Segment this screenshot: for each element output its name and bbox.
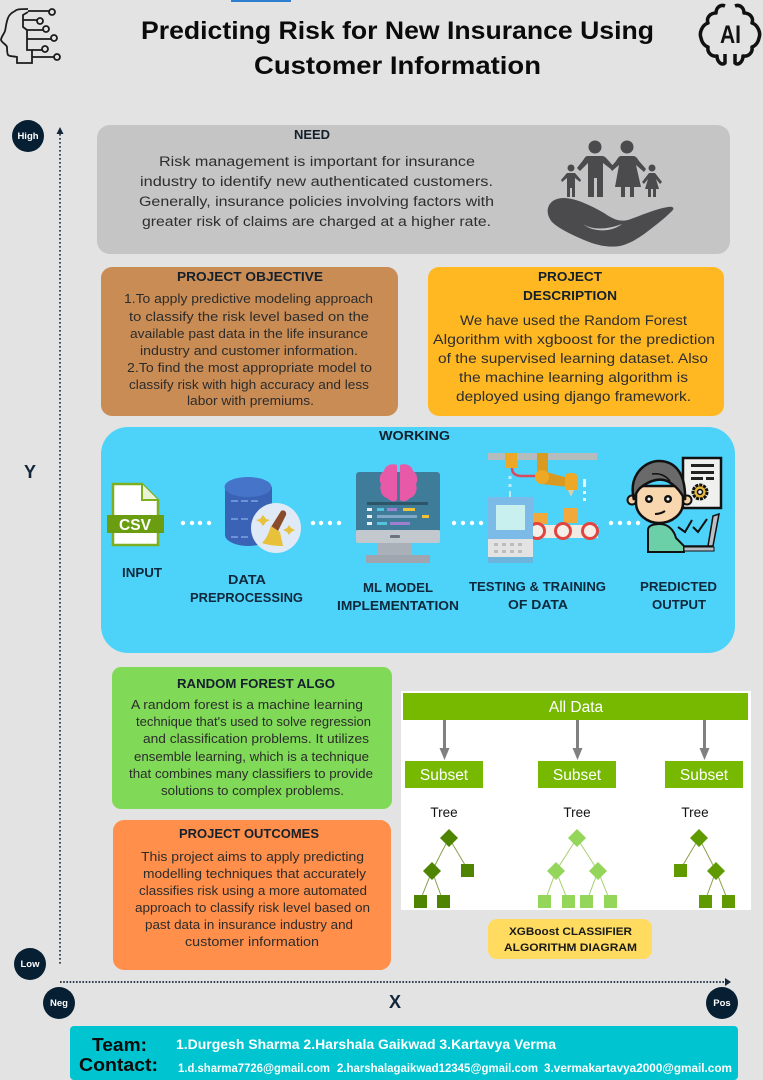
arrows — [440, 720, 710, 760]
panel: project outcomes — [113, 820, 391, 970]
tree labels — [430, 805, 709, 820]
objective text: available past data in the life insurance — [130, 327, 368, 341]
axis label: Pos — [706, 987, 738, 1019]
objective text: classify risk with high accuracy and less — [129, 378, 369, 392]
random forest text: ensemble learning, which is a technique — [134, 750, 369, 764]
title — [141, 17, 654, 80]
step label: data preprocessing: PREPROCESSING — [190, 590, 303, 605]
heading: project description: PROJECT — [538, 269, 602, 284]
step label: ml model implementation: ML MODEL — [363, 580, 433, 595]
axis label: Low — [14, 948, 46, 980]
random forest text: A random forest is a machine learning — [131, 698, 363, 712]
tree 1 — [414, 829, 474, 908]
xgboost diagram: All Data — [549, 699, 604, 716]
icon: csv file: CSV — [119, 517, 151, 534]
connector dots — [609, 521, 640, 525]
outcomes text: classifies risk using a more automated — [139, 884, 367, 898]
random forest text — [129, 698, 373, 798]
need text — [139, 154, 494, 229]
connector dots — [181, 521, 211, 525]
axis label: Neg: Neg — [50, 998, 68, 1009]
contact emails: 1.d.sharma7726@gmail.com — [178, 1063, 330, 1075]
heading: project description: DESCRIPTION — [523, 288, 617, 303]
icon: monitor with brain — [356, 464, 440, 563]
panel: need — [97, 125, 730, 254]
outcomes text: approach to classify risk level based on — [135, 901, 370, 915]
outcomes text: This project aims to apply predicting — [141, 850, 364, 864]
description text: deployed using django framework. — [456, 389, 691, 404]
need text: Generally, insurance policies involving factors with — [139, 194, 494, 209]
objective text: 2.To find the most appropriate model to — [127, 361, 372, 375]
contact emails: 2.harshalagaikwad12345@gmail.com — [337, 1063, 538, 1075]
objective text: industry and customer information. — [140, 344, 358, 358]
contact emails — [178, 1063, 732, 1075]
panel: project objective — [101, 267, 398, 416]
step label: testing and training — [469, 579, 606, 612]
step label: predicted output — [640, 579, 717, 612]
subset boxes — [405, 761, 743, 788]
step label: ml model implementation: IMPLEMENTATION — [337, 598, 459, 613]
heading: project objective: PROJECT OBJECTIVE — [177, 269, 323, 284]
axis label: Low: Low — [20, 959, 40, 970]
step label: testing and training: OF DATA — [508, 597, 569, 612]
objective text: to classify the risk level based on the — [129, 310, 369, 324]
step label: ml model implementation — [337, 580, 459, 613]
step label: testing and training: TESTING & TRAINING — [469, 579, 606, 594]
contact emails: 3.vermakartavya2000@gmail.com — [544, 1063, 732, 1075]
random forest text: that combines many classifiers to provide — [129, 767, 373, 781]
icon: csv file — [107, 484, 164, 545]
caption: xgboost: ALGORITHM DIAGRAM — [504, 942, 637, 954]
random forest text: and classification problems. It utilizes — [143, 732, 369, 746]
random forest text: technique that's used to solve regression — [136, 715, 371, 729]
need text: Risk management is important for insurance — [159, 154, 475, 169]
tree 2 — [538, 829, 617, 908]
axis label: High: High — [17, 131, 39, 142]
team bar — [70, 1026, 738, 1080]
axis label: Pos: Pos — [713, 998, 731, 1009]
icon: AI brain: AI — [720, 21, 741, 49]
heading: project description — [523, 269, 617, 303]
axis label: Neg — [43, 987, 75, 1019]
outcomes text: customer information — [185, 935, 319, 949]
subset boxes: Subset — [553, 767, 602, 784]
caption: xgboost: XGBoost CLASSIFIER — [509, 926, 632, 938]
step label: data preprocessing — [190, 572, 303, 605]
connector dots — [452, 521, 483, 525]
tree labels: Tree — [563, 805, 591, 820]
description text: the machine learning algorithm is — [459, 370, 688, 385]
contact label: Contact: — [79, 1055, 158, 1075]
heading: project outcomes: PROJECT OUTCOMES — [179, 826, 319, 841]
icon: person with report — [628, 458, 721, 552]
panel: project description — [428, 267, 724, 416]
icon: testing robot line — [488, 453, 598, 563]
random forest text: solutions to complex problems. — [161, 784, 344, 798]
description text: of the supervised learning dataset. Also — [438, 351, 708, 366]
heading: working: WORKING — [379, 428, 450, 443]
team label: Team: — [92, 1035, 147, 1055]
axis title: X: X — [389, 992, 401, 1012]
subset boxes: Subset — [420, 767, 469, 784]
outcomes text: past data in insurance industry and — [145, 918, 353, 932]
heading: need: NEED — [294, 127, 330, 142]
title: Predicting Risk for New Insurance Using — [141, 17, 654, 45]
axis title: Y: Y — [24, 462, 36, 482]
step label: data preprocessing: DATA — [228, 572, 267, 587]
outcomes text: modelling techniques that accurately — [143, 867, 367, 881]
xgboost diagram — [401, 691, 751, 910]
icon: circuit head — [1, 9, 60, 63]
tree labels: Tree — [681, 805, 709, 820]
objective text: labor with premiums. — [187, 394, 314, 408]
need text: greater risk of claims are charged at a higher rate. — [142, 214, 491, 229]
icon: AI brain — [700, 5, 760, 64]
need text: industry to identify new authenticated customers. — [140, 174, 493, 189]
step label: predicted output: OUTPUT — [652, 597, 706, 612]
objective text: 1.To apply predictive modeling approach — [124, 292, 373, 306]
tree 3 — [674, 829, 735, 908]
team names: 1.Durgesh Sharma 2.Harshala Gaikwad 3.Kartavya Verma — [176, 1036, 556, 1052]
icon: family in hand — [548, 140, 673, 247]
description text — [433, 313, 715, 404]
title: Customer Information — [254, 52, 541, 80]
heading: random forest: RANDOM FOREST ALGO — [177, 676, 335, 691]
panel: working — [101, 427, 735, 653]
subset boxes: Subset — [680, 767, 729, 784]
step label: input: INPUT — [122, 565, 162, 580]
description text: Algorithm with xgboost for the prediction — [433, 332, 715, 347]
tree labels: Tree — [430, 805, 458, 820]
axis label: High — [12, 120, 44, 152]
connector dots — [311, 521, 341, 525]
description text: We have used the Random Forest — [460, 313, 687, 328]
y axis — [56, 127, 64, 965]
step label: predicted output: PREDICTED — [640, 579, 717, 594]
icon: database and broom — [224, 477, 301, 553]
panel: random forest algo — [112, 667, 392, 809]
outcomes text — [135, 850, 370, 949]
x axis — [60, 978, 731, 986]
objective text — [124, 292, 373, 408]
caption: xgboost — [488, 919, 652, 959]
